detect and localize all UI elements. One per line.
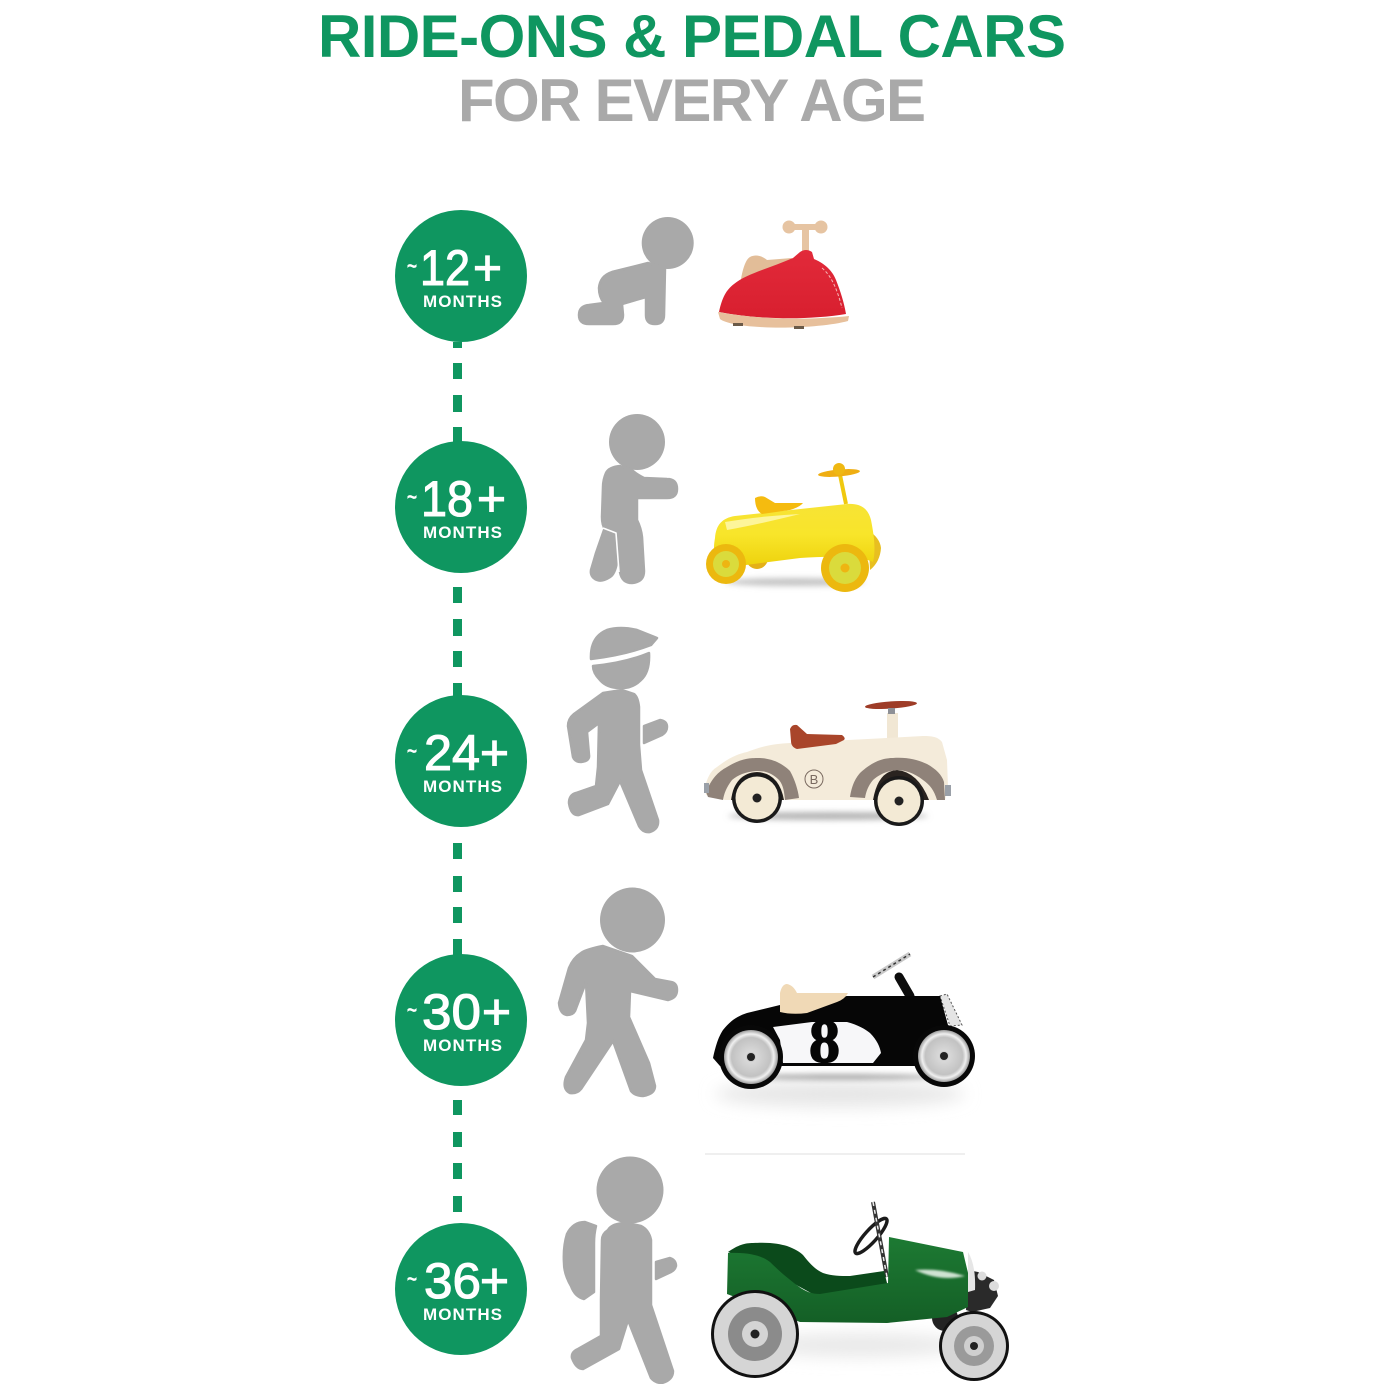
yellow car steering wheel [818, 463, 860, 504]
icon: walking child [559, 888, 677, 1096]
cream car steering [865, 700, 917, 740]
age badge: 36+ months [395, 1223, 527, 1355]
age badge: 30+ months: 30 [422, 984, 481, 1040]
faint line [705, 1153, 965, 1155]
bonnet highlight [915, 1270, 965, 1278]
yellow car seat [755, 496, 803, 514]
yellow car highlight [725, 514, 800, 530]
green car wheels [711, 1290, 1009, 1381]
black car shadow [715, 1081, 965, 1107]
cream car logo: B [810, 772, 818, 787]
cream car fenders [706, 758, 945, 800]
number 8: 8 [809, 1008, 840, 1076]
car: green vintage pedal car [711, 1202, 1009, 1381]
age badge: 24+ months: MONTHS [423, 777, 502, 796]
cream car logo [805, 770, 823, 788]
white panel [773, 1022, 881, 1063]
red car stitching [822, 268, 842, 308]
age badge: 30+ months: ~ [407, 997, 417, 1024]
age badge: 12+ months: 12 [420, 240, 470, 296]
red car body [719, 250, 846, 318]
red car casters [733, 323, 804, 329]
age badge: 12+ months: + [473, 240, 502, 296]
title [318, 3, 1066, 134]
green car shadow [755, 1333, 965, 1357]
cream car wheel wells [731, 770, 929, 800]
age badge: 18+ months: + [477, 471, 506, 527]
age badge: 24+ months [395, 695, 527, 827]
age badge: 30+ months [395, 954, 527, 1086]
red car base [718, 312, 849, 328]
age badge: 30+ months: + [482, 984, 511, 1040]
age badge: 18+ months: MONTHS [423, 523, 502, 542]
car: cream speedster [704, 700, 951, 826]
age badge: 30+ months: MONTHS [423, 1036, 502, 1055]
yellow car shadow [725, 578, 865, 586]
cream car body [705, 736, 948, 800]
age badge: 12+ months [395, 210, 527, 342]
red car handle [782, 220, 828, 251]
black car seat [780, 984, 848, 1014]
icon: crawling baby [579, 217, 694, 324]
far wheel [932, 1305, 958, 1331]
green car body [727, 1237, 968, 1323]
age badge: 36+ months: MONTHS [423, 1305, 502, 1324]
black car steering [873, 954, 910, 996]
car: black number 8 racer [713, 954, 975, 1107]
engine [966, 1252, 999, 1312]
far wheel [746, 547, 768, 569]
cream car wheels [732, 773, 924, 826]
icon: child with backpack [564, 1156, 676, 1383]
green car interior [728, 1243, 887, 1298]
icon: toddler [591, 414, 677, 583]
rear bumper [868, 530, 881, 570]
red car seat [741, 256, 792, 281]
cream car seat [790, 725, 845, 749]
dashed timeline [453, 342, 462, 1212]
age badge: 24+ months: 24 [424, 725, 480, 781]
yellow car wheels [706, 544, 869, 592]
age badge: 36+ months: 36 [424, 1253, 481, 1309]
age badge: 12+ months: MONTHS [423, 292, 502, 311]
black car body [713, 996, 973, 1066]
age badge: 18+ months: 18 [421, 471, 473, 527]
age badge: 24+ months: + [480, 725, 509, 781]
title: FOR EVERY AGE [458, 67, 926, 134]
age badge: 18+ months [395, 441, 527, 573]
age badge: 36+ months: ~ [407, 1266, 417, 1293]
black car wheels [719, 1025, 975, 1089]
icon: walking child with cap [568, 628, 667, 832]
yellow car body [714, 504, 874, 565]
grille [940, 994, 962, 1026]
title: RIDE-ONS & PEDAL CARS [318, 3, 1066, 70]
age badge: 24+ months: ~ [407, 738, 417, 765]
age badge: 12+ months: ~ [407, 253, 417, 280]
green car steering [851, 1202, 891, 1277]
car: red ride-on [718, 220, 849, 329]
age badge: 36+ months: + [480, 1253, 509, 1309]
cream car shadow [728, 812, 928, 820]
car: yellow ride-on [706, 463, 881, 592]
age badge: 18+ months: ~ [407, 484, 417, 511]
bumpers [704, 783, 951, 796]
